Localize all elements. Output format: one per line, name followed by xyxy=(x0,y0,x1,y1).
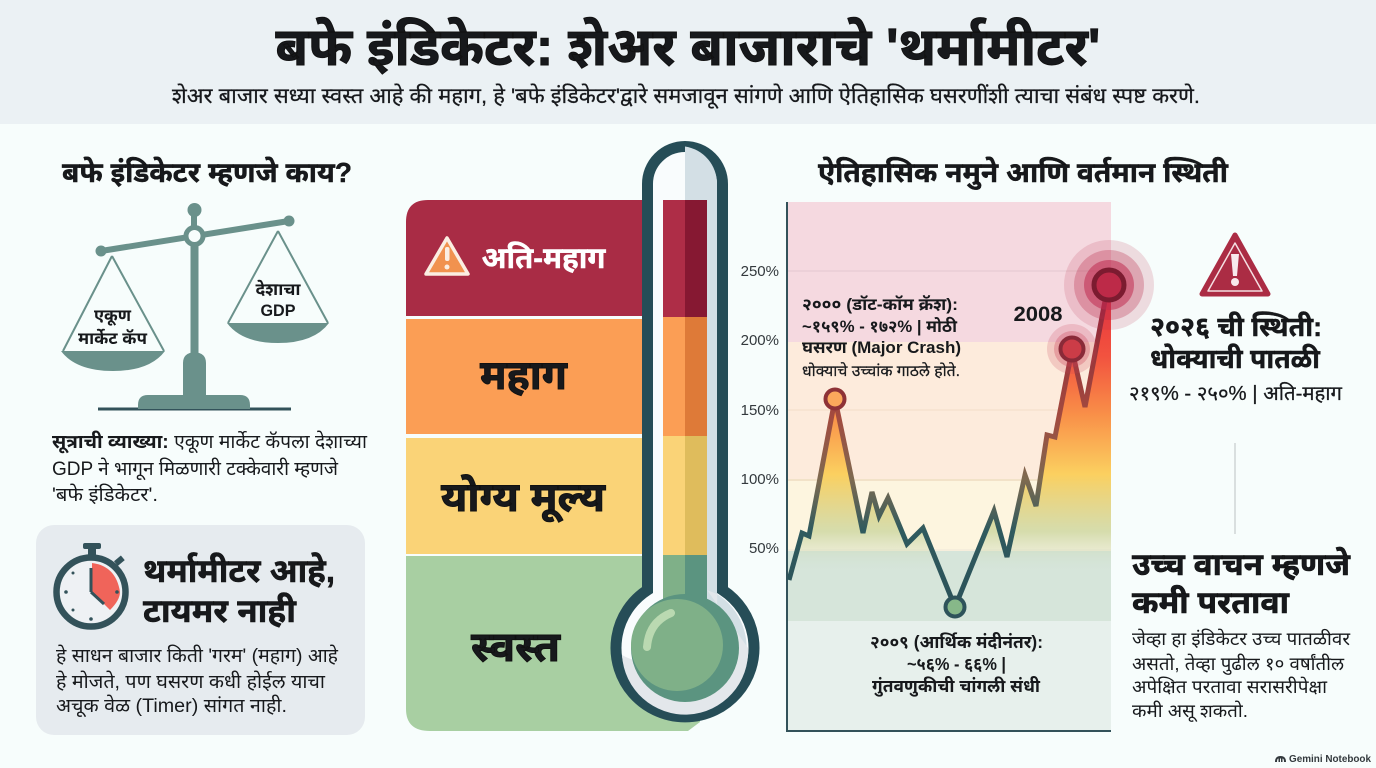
watermark: Gemini Notebook: Gemini Notebook xyxy=(1289,754,1371,765)
heading: high reading xyxy=(1132,547,1351,620)
text block: formula definition xyxy=(52,430,368,506)
text block: low returns: असतो, तेव्हा पुढील १० वर्षांतील xyxy=(1132,653,1344,676)
text block: timer description xyxy=(56,644,339,718)
marker: 2000 peak xyxy=(826,390,844,408)
heading: thermometer not timer xyxy=(143,551,335,629)
callout: 2009 after recession: २००९ (आर्थिक मंदीनंतर): xyxy=(870,632,1043,652)
label: GDP of country: देशाचा xyxy=(256,279,302,299)
axis labels: 100% xyxy=(741,471,779,488)
marker: 2008 peak xyxy=(1047,324,1097,374)
callout: 2000 dot-com crash xyxy=(802,294,961,380)
callout: 2000 dot-com crash: घसरण (Major Crash) xyxy=(802,338,961,357)
zone backgrounds xyxy=(787,202,1111,731)
band: fair value xyxy=(406,438,650,554)
column: red xyxy=(663,200,685,317)
callout: 2009 after recession xyxy=(870,632,1043,697)
text block: timer description: हे मोजते, पण घसरण कधी होईल याचा xyxy=(56,670,326,693)
heading: thermometer not timer: टायमर नाही xyxy=(143,592,297,629)
band: expensive xyxy=(406,319,650,434)
callout: 2000 dot-com crash: ~१५९% - १७२% | मोठी xyxy=(802,316,958,336)
text block: timer description: अचूक वेळ (Timer) सांगत नाही. xyxy=(56,694,287,718)
heading: 2026 status: २०२६ ची स्थिती: xyxy=(1150,312,1322,342)
marker: 2009 low xyxy=(946,598,964,616)
heading: historic patterns: ऐतिहासिक नमुने आणि वर्तमान स्थिती xyxy=(818,155,1229,190)
icon: stopwatch xyxy=(56,543,126,626)
label: 2008: 2008 xyxy=(1014,303,1063,326)
label: total market cap: एकूण xyxy=(94,306,131,327)
icon: balance scale: मार्केट कॅप xyxy=(78,328,148,348)
heading: 2026 status: धोक्याची पातळी xyxy=(1150,343,1321,374)
icon: balance scale: GDP xyxy=(260,301,296,320)
text: 2026 range: २१९% - २५०% | अति-महाग xyxy=(1129,381,1343,405)
panel: what is the Buffett indicator xyxy=(52,155,368,506)
subtitle: शेअर बाजार सध्या स्वस्त आहे की महाग, हे 'बफे इंडिकेटर'द्वारे समजावून सांगणे आणि ऐतिहासिक घसरणींशी त्याचा संबंध स्पष्ट करणे. xyxy=(172,82,1200,110)
text block: low returns xyxy=(1132,628,1351,723)
label: fair value: योग्य मूल्य xyxy=(441,474,606,523)
icon: balance scale xyxy=(61,203,329,409)
area under line xyxy=(789,285,1111,620)
label: cheap: स्वस्त xyxy=(471,623,561,670)
label: expensive: महाग xyxy=(480,352,568,398)
text block: formula definition: सूत्राची व्याख्या: एकूण मार्केट कॅपला देशाच्या xyxy=(52,430,368,454)
column: orange xyxy=(663,317,685,436)
title: बफे इंडिकेटर: शेअर बाजाराचे 'थर्मामीटर' xyxy=(276,17,1100,77)
icon: warning triangle small xyxy=(426,238,468,274)
callout: 2000 dot-com crash: २००० (डॉट-कॉम क्रॅश): xyxy=(802,294,958,314)
band: cheap xyxy=(406,556,700,731)
heading: what is it: बफे इंडिकेटर म्हणजे काय? xyxy=(62,155,352,188)
label: very expensive: अति-महाग xyxy=(482,241,606,275)
panel: thermometer not timer xyxy=(36,525,365,735)
chart: buffett indicator history xyxy=(741,202,1154,731)
column: green xyxy=(663,555,685,605)
axis labels: 250% xyxy=(741,263,779,280)
data line xyxy=(789,285,1108,607)
callout: 2000 dot-com crash: धोक्याचे उच्चांक गाठले होते. xyxy=(802,361,960,380)
callout: 2009 after recession: ~५६% - ६६% | xyxy=(907,654,1006,674)
text block: low returns: अपेक्षित परतावा सरासरीपेक्षा xyxy=(1132,676,1327,697)
axes xyxy=(787,202,1111,731)
axis labels: 200% xyxy=(741,332,779,349)
header xyxy=(0,0,1376,124)
text block: low returns: कमी असू शकतो. xyxy=(1132,701,1248,723)
panel: high reading low return xyxy=(1132,547,1351,723)
axis labels: 150% xyxy=(741,402,779,419)
thermometer xyxy=(616,146,754,717)
marker: 2026 peak xyxy=(1064,240,1154,330)
text block: formula definition: GDP ने भागून मिळणारी टक्केवारी म्हणजे xyxy=(52,457,339,481)
axis labels xyxy=(741,263,779,557)
heading: thermometer not timer: थर्मामीटर आहे, xyxy=(143,551,335,589)
text block: formula definition: 'बफे इंडिकेटर'. xyxy=(52,483,158,506)
axis labels: 50% xyxy=(749,540,779,557)
column: yellow xyxy=(663,436,685,555)
callout: 2009 after recession: गुंतवणुकीची चांगली संधी xyxy=(872,676,1041,697)
heading: high reading: कमी परतावा xyxy=(1132,585,1290,620)
bulb highlight xyxy=(647,613,671,647)
band: very expensive xyxy=(406,200,650,316)
heading: 2026 status xyxy=(1150,312,1322,374)
icon: warning triangle xyxy=(1202,235,1268,294)
glass tube and bulb xyxy=(616,146,754,717)
text block: low returns: जेव्हा हा इंडिकेटर उच्च पातळीवर xyxy=(1132,628,1351,649)
panel: 2026 status xyxy=(1129,235,1343,405)
heading: high reading: उच्च वाचन म्हणजे xyxy=(1132,547,1351,582)
text block: timer description: हे साधन बाजार किती 'गरम' (महाग) आहे xyxy=(56,644,339,667)
bulb liquid xyxy=(631,594,739,702)
panel: valuation bands xyxy=(406,200,700,731)
